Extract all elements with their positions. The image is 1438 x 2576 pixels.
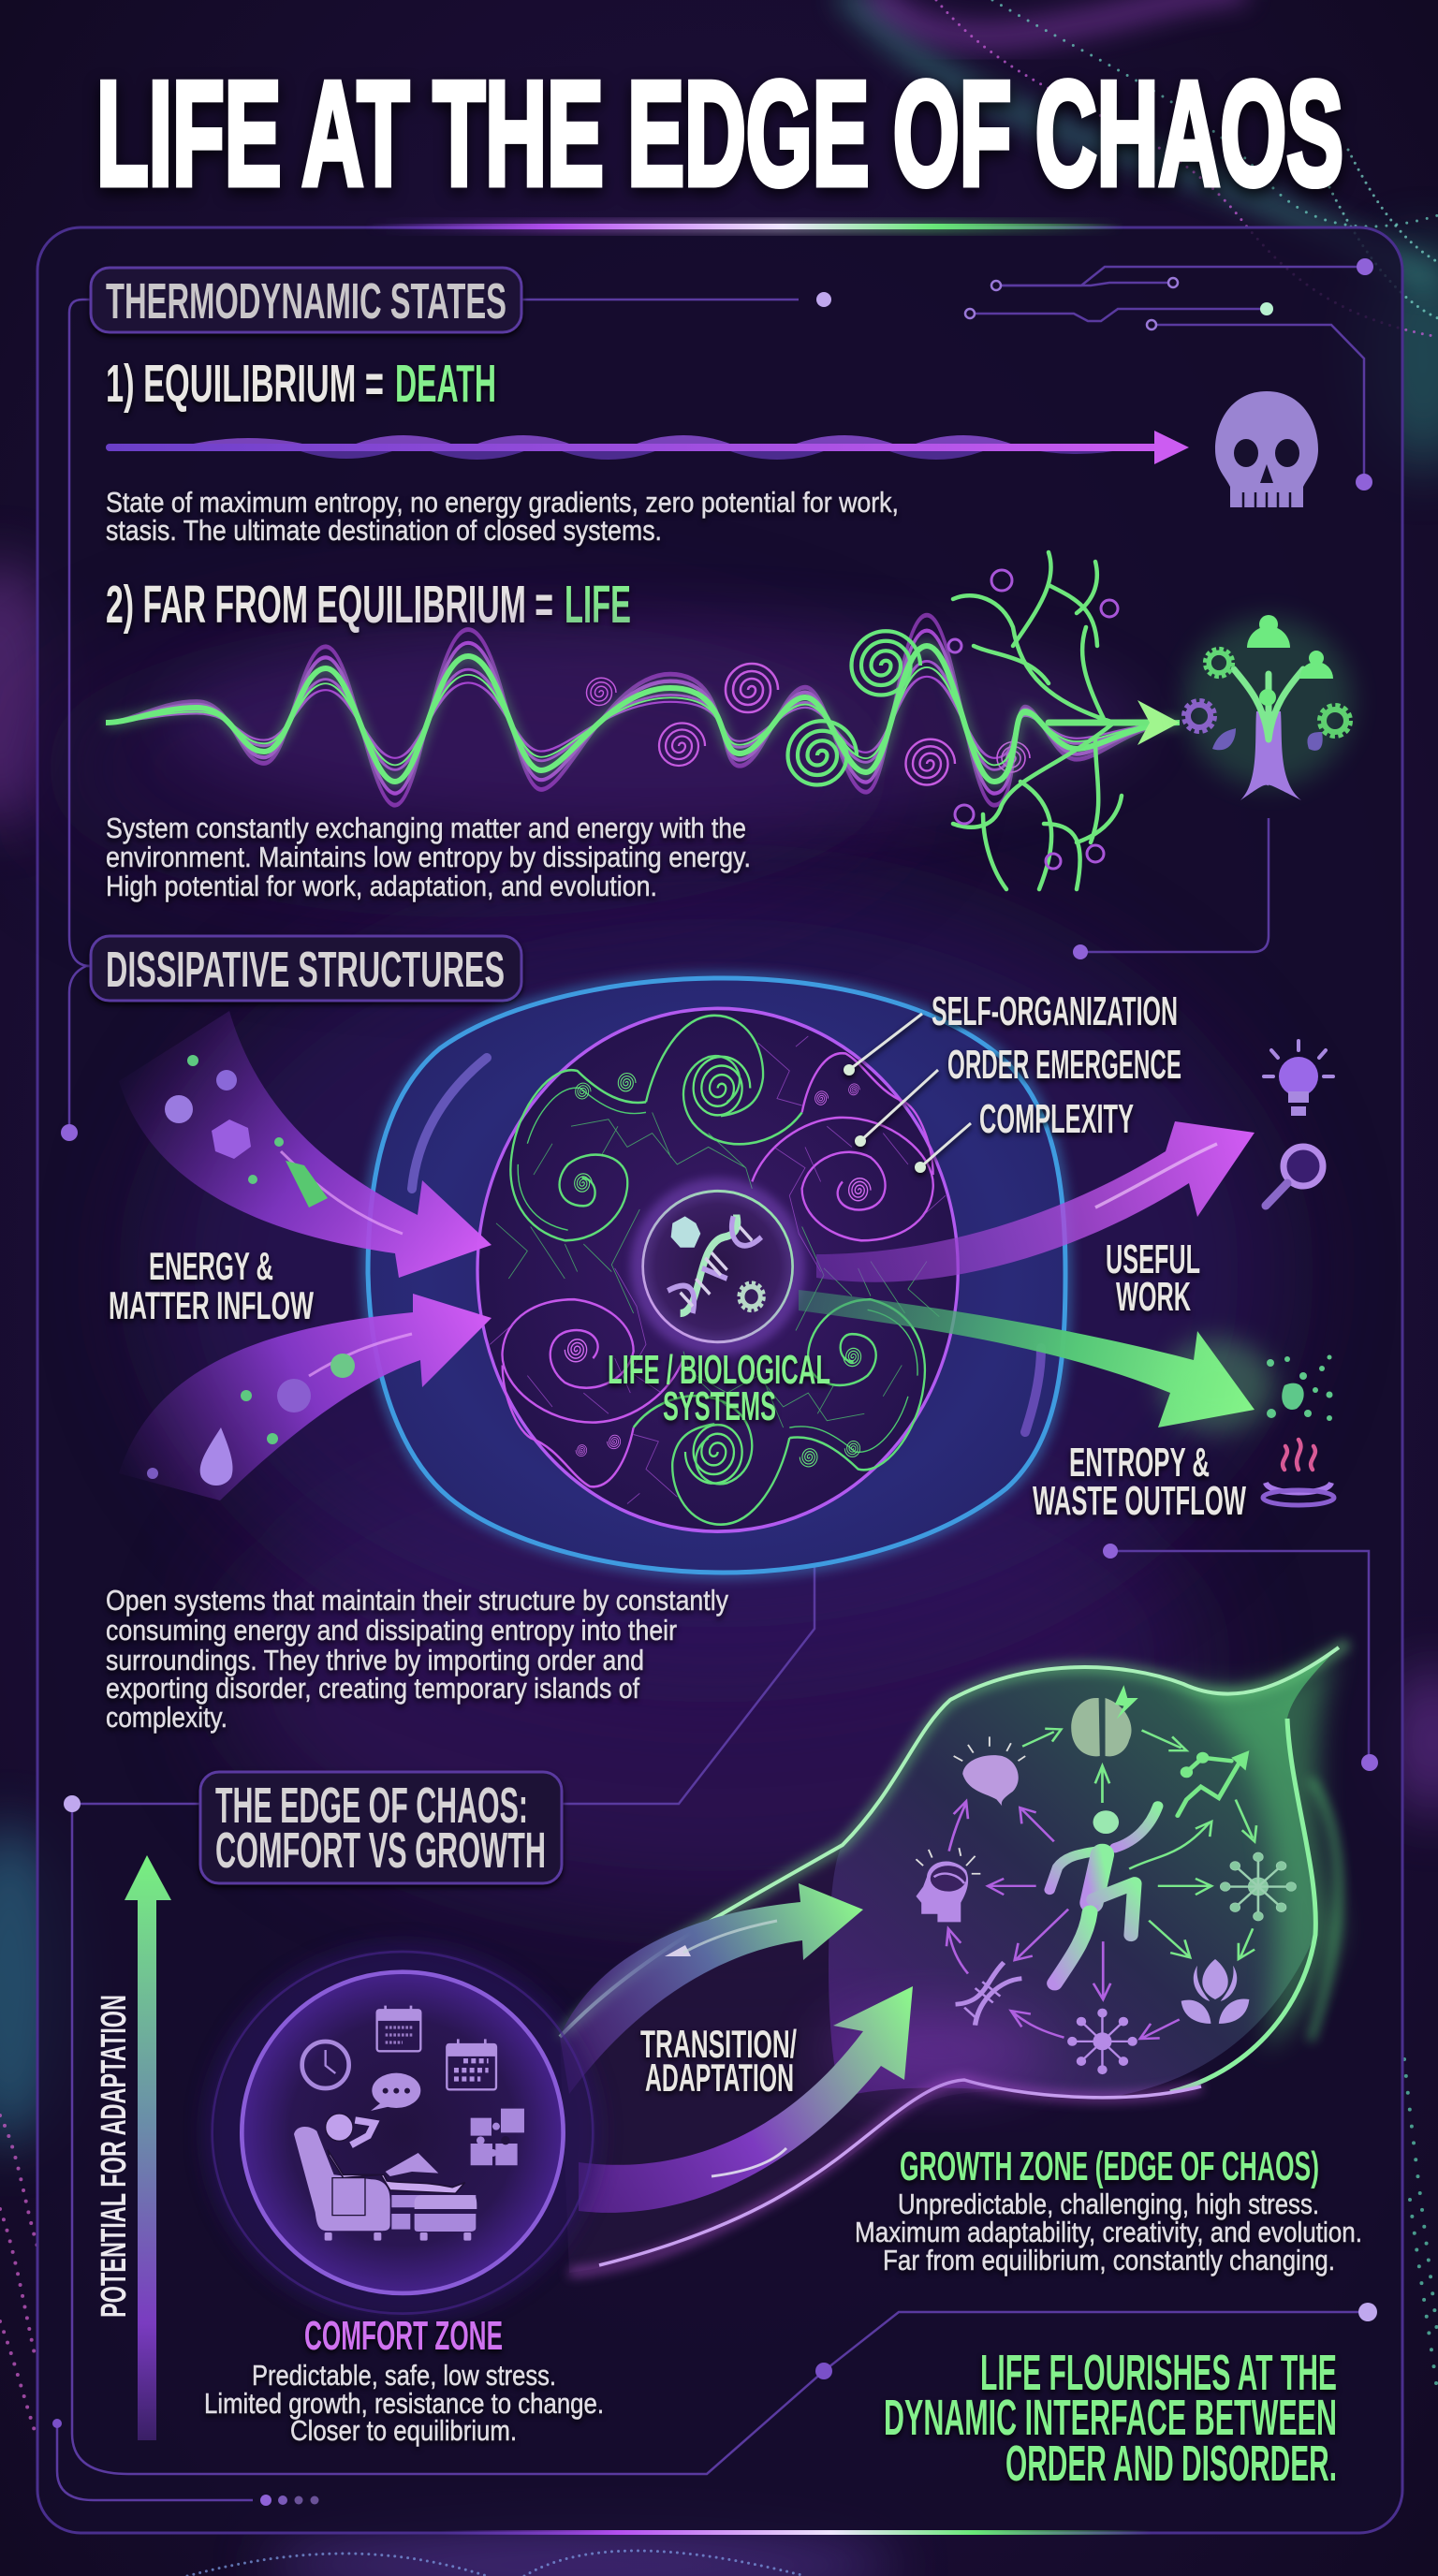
diagram: cell membrane [368, 978, 1065, 1573]
label: entropy outflow [1033, 1440, 1246, 1524]
heading: edge of chaos [200, 1772, 562, 1883]
label: transition: TRANSITION/ [640, 2022, 797, 2066]
chart: chaotic life wave [106, 552, 1180, 889]
icon: climbing figure [1049, 1806, 1158, 1983]
text: far from equilibrium description [106, 812, 751, 902]
text: dissipative description: Open systems that maintain their structure by constantly [106, 1584, 728, 1617]
core cell [643, 1191, 793, 1342]
arrow: inflow top [119, 1011, 492, 1278]
icon: tree of life [1184, 615, 1353, 800]
callouts: cell properties: SELF-ORGANIZATION [932, 988, 1178, 1034]
label: entropy outflow: WASTE OUTFLOW [1033, 1478, 1246, 1524]
chart: flat wave arrow [106, 431, 1189, 464]
arrow: useful work outflow [816, 1121, 1255, 1282]
icon: light bulb [1264, 1041, 1333, 1116]
icon: speech bubble [371, 2073, 420, 2111]
text: far from equilibrium description: System constantly exchanging matter and energy with the [106, 812, 746, 844]
arrow: entropy outflow [799, 1290, 1273, 1432]
icon: brain with rays [954, 1736, 1025, 1806]
text: dissipative description [106, 1584, 728, 1734]
icon: heat waves [1263, 1440, 1334, 1505]
label: transition: ADAPTATION [645, 2056, 794, 2100]
diagram: growth zone icons [916, 1685, 1296, 2074]
text: dissipative description: consuming energy and dissipating entropy into their [106, 1614, 677, 1647]
label: energy inflow [109, 1244, 314, 1327]
icon: growth chart [1178, 1750, 1249, 1816]
heading: far from equilibrium = life: LIFE [565, 575, 631, 635]
icon: magnifier [1266, 1147, 1323, 1206]
heading: edge of chaos: THE EDGE OF CHAOS: [215, 1778, 528, 1834]
text: dissipative description: complexity. [106, 1701, 227, 1734]
label: life systems [608, 1347, 830, 1429]
label: energy inflow: MATTER INFLOW [109, 1283, 314, 1327]
label: growth zone [855, 2144, 1362, 2276]
text: dissipative description: exporting disorder, creating temporary islands of [106, 1672, 639, 1705]
label: life systems: LIFE / BIOLOGICAL [608, 1347, 830, 1393]
icon: head with brain [916, 1848, 980, 1922]
arrow: transition upper [560, 1883, 863, 2094]
icon: skull [1215, 391, 1318, 507]
label: growth zone: Unpredictable, challenging, high stress. [898, 2188, 1319, 2220]
arrows: growth cycle [946, 1729, 1256, 2039]
callouts: cell properties [844, 988, 1181, 1173]
label: useful work: USEFUL [1106, 1237, 1200, 1282]
text: equilibrium description: stasis. The ultimate destination of closed systems. [106, 514, 662, 547]
label: useful work: WORK [1116, 1274, 1191, 1320]
label: comfort zone: Limited growth, resistance to change. [204, 2387, 604, 2420]
label: useful work [1106, 1237, 1200, 1320]
heading: thermodynamic states: THERMODYNAMIC STATES [106, 273, 506, 329]
icon: planner [377, 2006, 420, 2051]
heading: dissipative structures: DISSIPATIVE STRUCTURES [106, 942, 505, 998]
icon: network right [1220, 1852, 1296, 1921]
diagram: inner swirl sphere [477, 1008, 958, 1531]
label: growth zone: Far from equilibrium, constantly changing. [883, 2244, 1335, 2276]
arrow: potential for adaptation [125, 1855, 171, 2440]
icon: puzzle [471, 2109, 524, 2165]
icon: reclining person in armchair [294, 2114, 477, 2241]
label: potential for adaptation: POTENTIAL FOR ADAPTATION [95, 1995, 134, 2318]
zone: growth blob [560, 1643, 1348, 2273]
text: far from equilibrium description: environment. Maintains low entropy by dissipating energy. [106, 841, 751, 873]
arrow: inflow bottom [119, 1294, 492, 1500]
label: transition [640, 2022, 797, 2100]
text: equilibrium description [106, 486, 899, 547]
tree branches [953, 552, 1161, 889]
heading: far from equilibrium = life [106, 575, 631, 635]
icon: DNA [956, 1962, 1021, 2026]
label: energy inflow: ENERGY & [149, 1244, 273, 1288]
arrow: transition lower [579, 1986, 913, 2213]
heading: far from equilibrium = life: 2) FAR FROM EQUILIBRIUM = [106, 575, 553, 635]
text: equilibrium description: State of maximum entropy, no energy gradients, zero potential for work, [106, 486, 899, 519]
callouts: cell properties: ORDER EMERGENCE [947, 1042, 1181, 1088]
icon: brain with lightning [1071, 1685, 1138, 1756]
text: far from equilibrium description: High potential for work, adaptation, and evolution. [106, 870, 657, 902]
callouts: cell properties: COMPLEXITY [979, 1096, 1134, 1142]
icon: scattering particles [1267, 1355, 1333, 1421]
heading: dissipative structures [91, 936, 521, 1001]
heading: equilibrium = death: DEATH [395, 354, 496, 414]
heading: equilibrium = death: 1) EQUILIBRIUM = [106, 354, 384, 414]
heading: thermodynamic states [91, 268, 521, 332]
label: comfort zone [204, 2313, 604, 2447]
icon: lotus [1181, 1959, 1249, 2024]
label: comfort zone: COMFORT ZONE [304, 2313, 503, 2359]
text: dissipative description: surroundings. They thrive by importing order and [106, 1644, 644, 1676]
label: life systems: SYSTEMS [663, 1383, 776, 1429]
icon: calendar [447, 2039, 496, 2089]
icon: network bottom [1067, 2009, 1137, 2074]
label: comfort zone: Closer to equilibrium. [290, 2414, 517, 2447]
label: entropy outflow: ENTROPY & [1069, 1440, 1210, 1486]
label: comfort zone: Predictable, safe, low stress. [252, 2359, 556, 2392]
zone: comfort circle [203, 1942, 602, 2323]
icon: clock [302, 2042, 349, 2088]
text: closing statement [884, 2345, 1337, 2492]
heading: edge of chaos: COMFORT VS GROWTH [215, 1822, 546, 1879]
